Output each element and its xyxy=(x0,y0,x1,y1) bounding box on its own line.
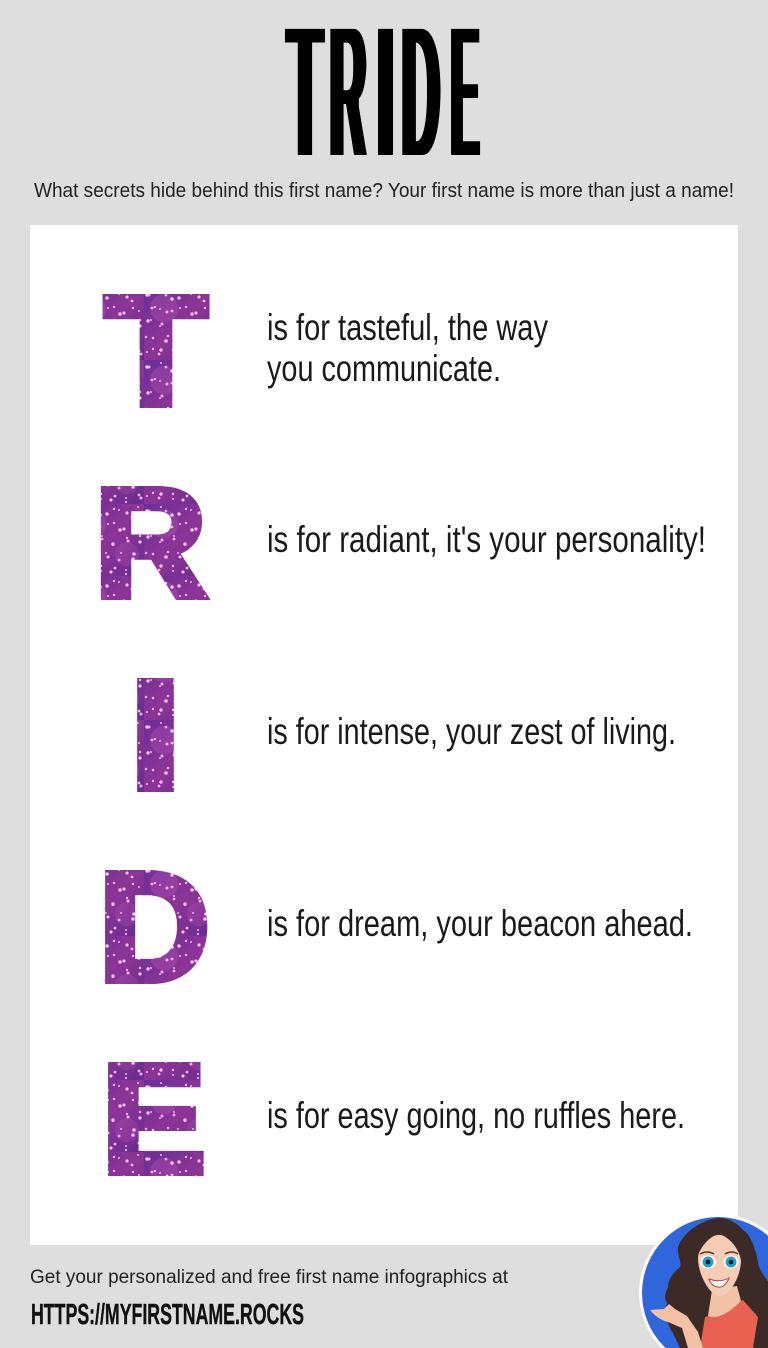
subtitle: What secrets hide behind this first name? Your first name is more than just a name! xyxy=(34,180,734,202)
row: letter D xyxy=(99,841,693,1013)
icon: galaxy letter D: D xyxy=(99,841,210,1013)
icon: galaxy letter E: E xyxy=(102,1033,206,1205)
row: letter E xyxy=(102,1033,685,1205)
text: T meaning: you communicate. xyxy=(267,348,501,389)
row: letter I xyxy=(130,649,676,821)
row: letter R xyxy=(94,457,706,629)
footer url: HTTPS://MYFIRSTNAME.ROCKS xyxy=(31,1299,304,1331)
footer text: Get your personalized and free first name infographics at xyxy=(30,1267,509,1288)
icon: avatar xyxy=(639,1214,768,1348)
text: T meaning xyxy=(267,307,548,389)
row: letter T xyxy=(105,265,548,437)
icon: galaxy letter I: I xyxy=(130,649,182,821)
icon: galaxy letter R: R xyxy=(94,457,206,629)
icon: galaxy letter T: T xyxy=(105,265,207,437)
panel: letters xyxy=(30,225,738,1245)
text: T meaning: is for tasteful, the way xyxy=(267,307,548,348)
